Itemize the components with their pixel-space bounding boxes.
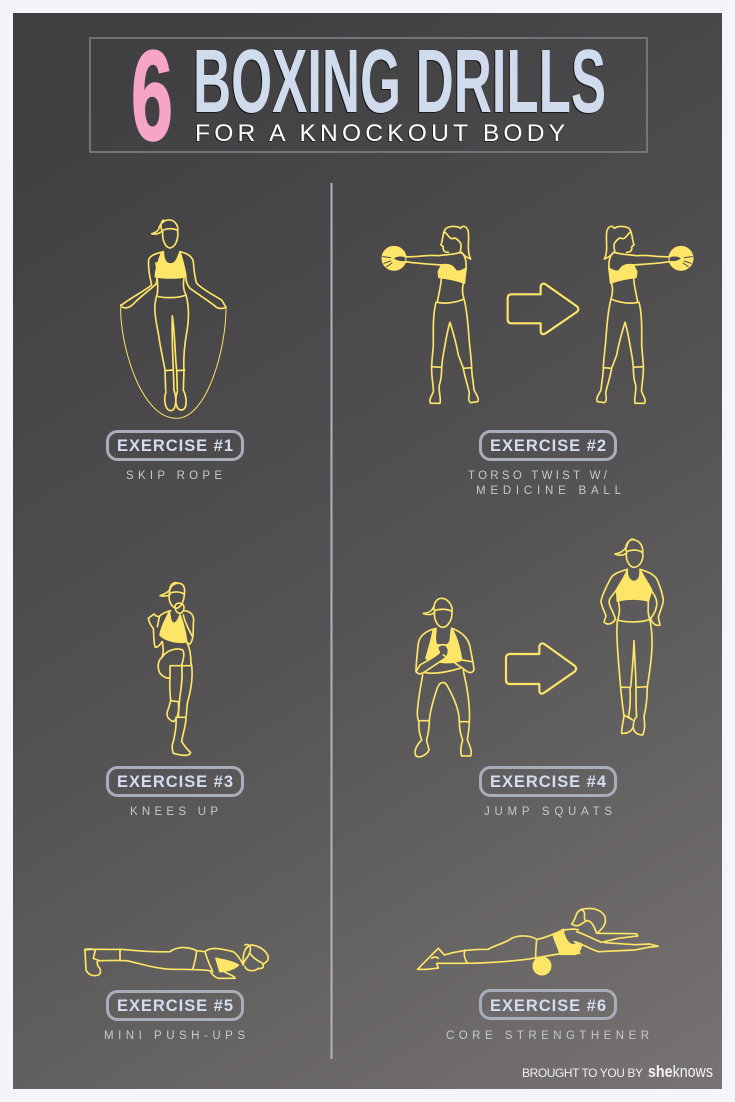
label: exercise 6: CORE STRENGTHENER: [446, 1030, 649, 1042]
arrow: jump squat: [506, 643, 576, 694]
label: exercise 5: [104, 992, 245, 1042]
label: exercise 4: EXERCISE #4: [490, 773, 607, 791]
label: exercise 2: EXERCISE #2: [490, 437, 606, 455]
footer credit: sheknows: [648, 1062, 713, 1081]
title block: [90, 25, 647, 168]
center divider: [330, 183, 332, 1059]
figure: jump squat, airborne: [601, 539, 663, 735]
label: exercise 4: [480, 768, 616, 818]
subheading: FOR A KNOCKOUT BODY: [195, 120, 565, 147]
figure: torso twist, start: [382, 226, 478, 403]
label: exercise 2: TORSO TWIST W/: [468, 470, 608, 482]
title frame: [90, 38, 647, 152]
figure: knees up: [148, 583, 194, 755]
numeral 6: 6: [131, 25, 173, 168]
label: exercise 3: KNEES UP: [130, 806, 218, 818]
label: exercise 5: EXERCISE #5: [117, 997, 233, 1015]
label: exercise 6: [446, 990, 649, 1042]
figure: jump squat, crouched: [415, 598, 474, 757]
label: exercise 4: JUMP SQUATS: [484, 806, 612, 818]
label: exercise 1: [108, 432, 242, 482]
footer credit: BROUGHT TO YOU BY: [522, 1066, 643, 1080]
footer credit: [522, 1062, 713, 1081]
label: exercise 5: MINI PUSH-UPS: [104, 1030, 245, 1042]
label: exercise 2: [468, 432, 622, 497]
label: exercise 3: EXERCISE #3: [117, 773, 233, 791]
label: exercise 1: SKIP ROPE: [126, 470, 222, 482]
figure: skip rope: [121, 220, 226, 418]
label: exercise 1: EXERCISE #1: [117, 437, 233, 455]
arrow: torso twist: [508, 284, 578, 334]
figure: core strengthener: [418, 908, 658, 975]
label: exercise 2: MEDICINE BALL: [476, 485, 622, 497]
figure: torso twist, end: [597, 226, 693, 403]
label: exercise 3: [108, 768, 242, 818]
label: exercise 6: EXERCISE #6: [490, 997, 606, 1015]
figure: mini push-ups: [85, 945, 268, 978]
